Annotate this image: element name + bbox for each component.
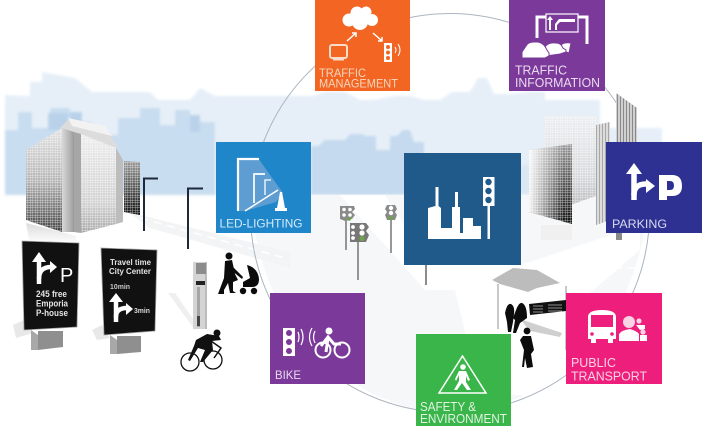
icon: cloud and devices xyxy=(330,6,400,62)
icon: cyclist xyxy=(181,330,222,371)
icon: woman with pram xyxy=(218,252,259,294)
panel: bike: BIKE xyxy=(275,370,301,382)
panel: public transport xyxy=(566,293,662,384)
icon: arrows and P xyxy=(39,260,53,284)
panel: traffic management: MANAGEMENT xyxy=(319,76,399,90)
parking guidance sign: 245 free xyxy=(36,289,67,299)
parking guidance sign: P xyxy=(60,265,73,287)
traffic lights xyxy=(340,205,397,280)
icon: arrows and P xyxy=(626,163,682,200)
parking guidance sign: P-house xyxy=(36,308,68,318)
panel: traffic information: INFORMATION xyxy=(515,76,600,90)
travel time sign xyxy=(92,248,157,354)
panel: safety and environment xyxy=(416,334,511,426)
icon: pedestrian warning triangle xyxy=(439,356,486,393)
parking guidance sign xyxy=(13,241,79,350)
road and ground inside circle xyxy=(128,195,646,413)
panel: public transport: PUBLIC xyxy=(571,356,616,370)
icon: travel arrows xyxy=(116,300,128,322)
icon: gantry and cars xyxy=(522,14,587,58)
panel: traffic management xyxy=(315,0,410,91)
people at bus stop xyxy=(505,303,534,368)
panel: traffic management: TRAFFIC xyxy=(319,66,366,80)
panel: safety and environment: ENVIRONMENT xyxy=(420,412,507,426)
parking guidance sign: Emporia xyxy=(36,298,69,308)
left office building xyxy=(26,118,140,244)
street lamps xyxy=(144,178,203,249)
panel: traffic information: TRAFFIC xyxy=(515,64,567,78)
icon: signal and cyclist xyxy=(283,328,350,358)
panel: LED lighting xyxy=(216,142,311,233)
icon: street lights and cone xyxy=(238,158,287,211)
travel time sign: 3min xyxy=(134,306,150,315)
panel: safety and environment: SAFETY & xyxy=(420,400,477,414)
panel: parking xyxy=(606,142,702,233)
panel: bike xyxy=(270,293,365,384)
icon: city skyline and traffic light xyxy=(428,177,494,239)
sign post xyxy=(425,262,427,285)
panel: public transport: TRANSPORT xyxy=(571,370,647,384)
travel time sign: Travel time xyxy=(110,257,151,267)
panel: parking: PARKING xyxy=(612,217,667,231)
big circle outline xyxy=(250,14,650,412)
icon: bus and passengers xyxy=(588,310,647,343)
panel: LED lighting: LED-LIGHTING xyxy=(220,218,303,230)
bike counter post xyxy=(168,262,207,330)
bus shelter xyxy=(492,268,566,350)
travel time sign: 10min xyxy=(110,282,130,291)
travel time sign: City Center xyxy=(109,266,152,276)
panel: central city and traffic light xyxy=(404,153,521,265)
panel: traffic information xyxy=(509,0,605,91)
right office buildings xyxy=(529,93,637,240)
skyline background xyxy=(5,72,662,195)
